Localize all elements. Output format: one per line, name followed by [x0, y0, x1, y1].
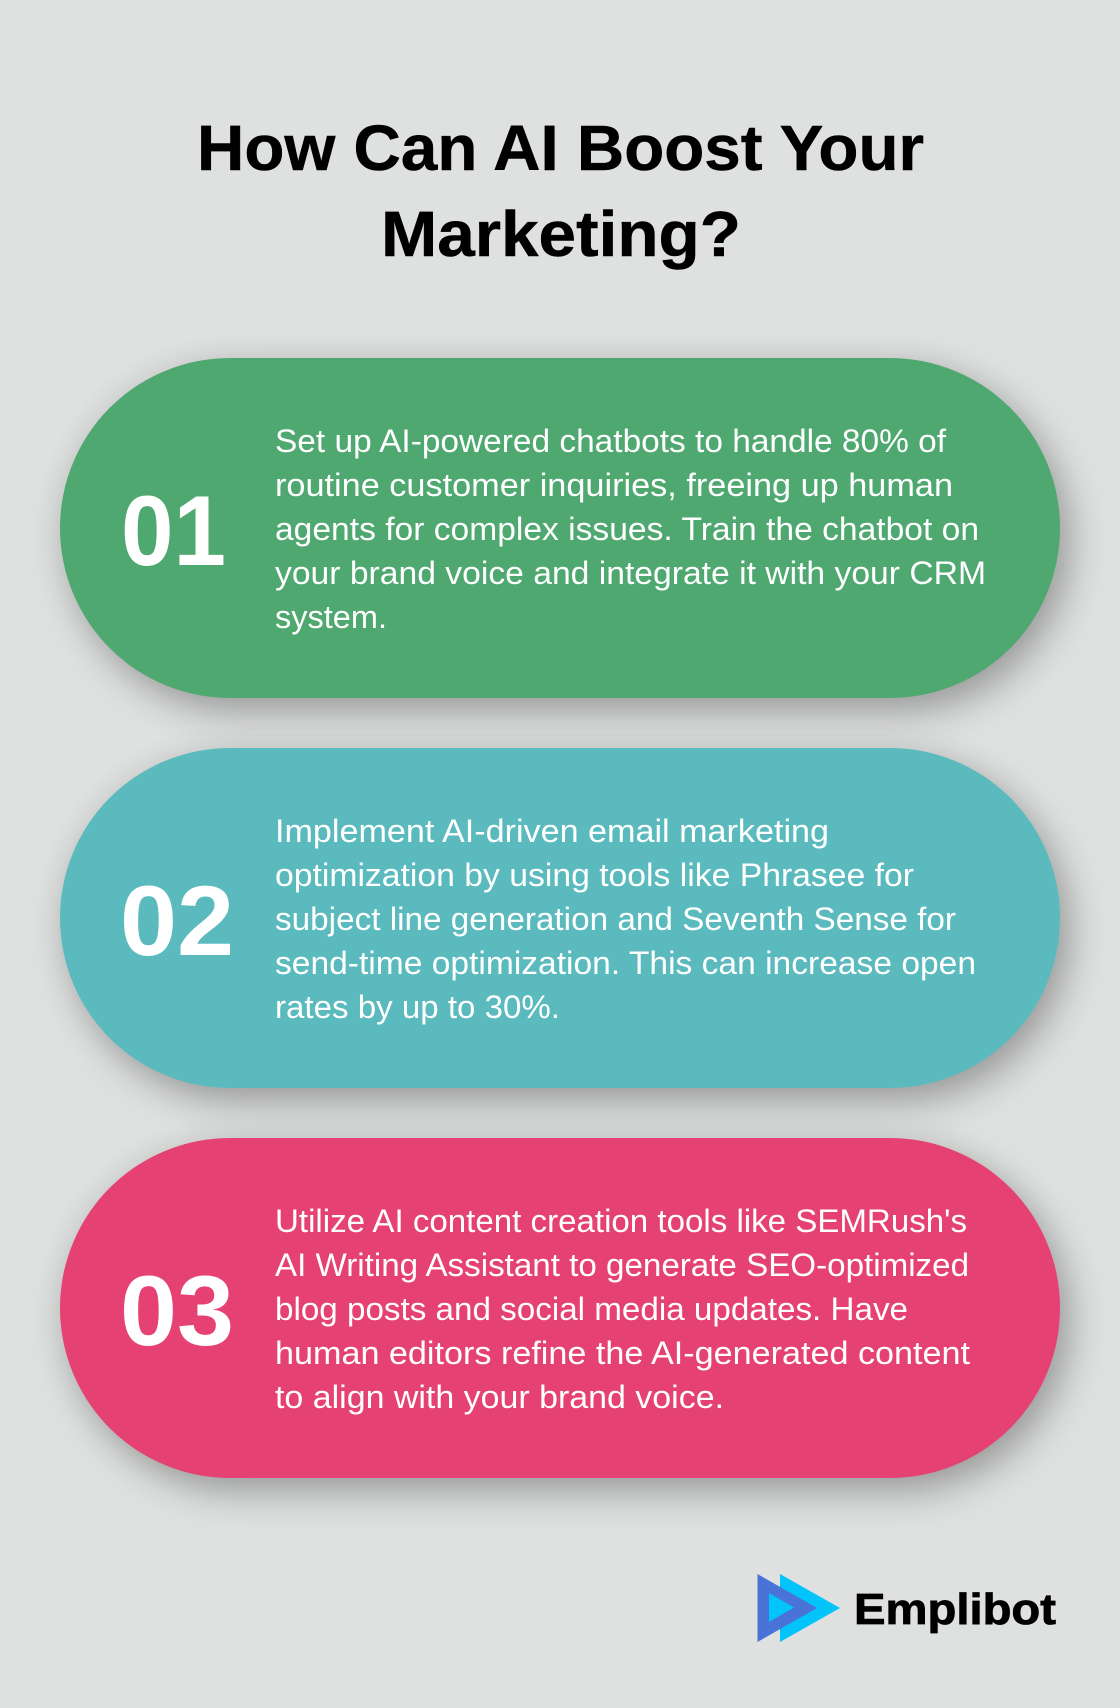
number 02: 02	[120, 865, 234, 976]
text: step 03 description: AI Writing Assistant to generate SEO-optimized	[275, 1247, 969, 1283]
title: Marketing?	[381, 198, 741, 270]
text: step 02 description: rates by up to 30%.	[275, 989, 560, 1025]
text: step 01 description	[275, 423, 986, 635]
icon: play triangles	[758, 1574, 840, 1642]
text: step 03 description: to align with your brand voice.	[275, 1379, 724, 1415]
text: step 01 description: system.	[275, 599, 387, 635]
text: step 01 description: Set up AI-powered chatbots to handle 80% of	[275, 423, 946, 459]
logo: Emplibot	[758, 1574, 1056, 1642]
wordmark: Emplibot	[854, 1585, 1056, 1634]
text: step 03 description: Utilize AI content creation tools like SEMRush's	[275, 1203, 967, 1239]
text: step 03 description: human editors refine the AI-generated content	[275, 1335, 970, 1371]
panel: step 01	[60, 358, 1060, 698]
title	[197, 112, 924, 270]
title: How Can AI Boost Your	[197, 112, 924, 184]
text: step 03 description	[275, 1203, 970, 1415]
number 03: 03	[120, 1255, 234, 1366]
text: step 03 description: blog posts and social media updates. Have	[275, 1291, 908, 1327]
text: step 01 description: agents for complex issues. Train the chatbot on	[275, 511, 979, 547]
text: step 02 description	[275, 813, 976, 1025]
text: step 02 description: send-time optimization. This can increase open	[275, 945, 976, 981]
text: step 01 description: your brand voice and integrate it with your CRM	[275, 555, 986, 591]
text: step 02 description: Implement AI-driven email marketing	[275, 813, 829, 849]
panel: step 02	[60, 748, 1060, 1088]
text: step 02 description: optimization by using tools like Phrasee for	[275, 857, 914, 893]
text: step 01 description: routine customer inquiries, freeing up human	[275, 467, 953, 503]
panel: step 03	[60, 1138, 1060, 1478]
number 01: 01	[121, 475, 226, 586]
text: step 02 description: subject line generation and Seventh Sense for	[275, 901, 956, 937]
